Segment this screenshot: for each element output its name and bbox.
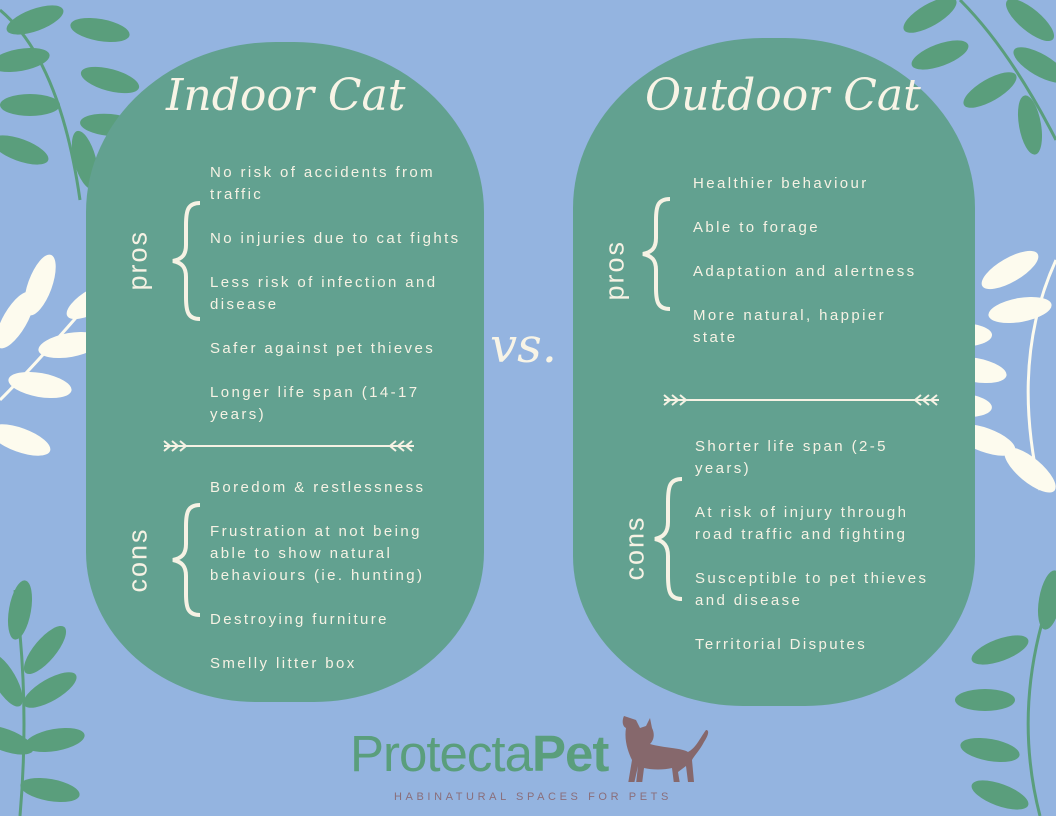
logo wordmark: ProtectaPet bbox=[350, 725, 608, 782]
divider arrow: outdoor bbox=[663, 394, 939, 406]
list: outdoor cons: road traffic and fighting bbox=[695, 526, 907, 543]
logo: ProtectaPet bbox=[350, 716, 708, 803]
list: outdoor cons: years) bbox=[695, 460, 751, 477]
list: indoor pros: years) bbox=[210, 406, 266, 423]
label: outdoor cons: cons bbox=[620, 515, 650, 580]
list: outdoor pros: Able to forage bbox=[693, 219, 820, 236]
list: indoor pros: traffic bbox=[210, 186, 263, 203]
brace: indoor pros bbox=[172, 201, 200, 321]
list: indoor pros: No risk of accidents from bbox=[210, 164, 435, 181]
list: indoor pros: disease bbox=[210, 296, 279, 313]
title: outdoor cat: Outdoor Cat bbox=[645, 70, 921, 121]
list: indoor cons: Destroying furniture bbox=[210, 611, 389, 628]
list: outdoor cons: Territorial Disputes bbox=[695, 636, 867, 653]
label: indoor pros: pros bbox=[122, 230, 152, 290]
divider arrow: indoor bbox=[163, 440, 414, 452]
list: indoor pros: Less risk of infection and bbox=[210, 274, 438, 291]
list: indoor cons: able to show natural bbox=[210, 545, 392, 562]
list: indoor pros: No injuries due to cat fights bbox=[210, 230, 461, 247]
list: indoor pros bbox=[210, 164, 461, 423]
list: indoor pros: Safer against pet thieves bbox=[210, 340, 435, 357]
list: indoor cons bbox=[210, 479, 425, 672]
leaves: top-right green bbox=[899, 0, 1056, 156]
panel: indoor cat bbox=[86, 42, 484, 702]
panel: outdoor cat bbox=[573, 38, 975, 706]
list: outdoor pros: Adaptation and alertness bbox=[693, 263, 917, 280]
list: outdoor pros: Healthier behaviour bbox=[693, 175, 869, 192]
list: outdoor cons: Susceptible to pet thieves bbox=[695, 570, 928, 587]
icon: cat silhouette bbox=[622, 716, 708, 782]
label: indoor cons: cons bbox=[122, 527, 152, 592]
label: outdoor pros: pros bbox=[600, 240, 630, 300]
list: indoor cons: Frustration at not being bbox=[210, 523, 422, 540]
brace: outdoor cons bbox=[654, 477, 682, 601]
list: indoor cons: Smelly litter box bbox=[210, 655, 357, 672]
list: outdoor pros: More natural, happier bbox=[693, 307, 886, 324]
leaves: top-left green bbox=[0, 0, 142, 200]
leaves: bottom-right green bbox=[955, 569, 1056, 816]
logo tagline: HABINATURAL SPACES FOR PETS bbox=[394, 791, 672, 803]
list: outdoor cons: At risk of injury through bbox=[695, 504, 908, 521]
title: indoor cat: Indoor Cat bbox=[166, 70, 405, 121]
vs.: vs. bbox=[490, 318, 557, 374]
leaves: right white bbox=[927, 244, 1056, 500]
list: indoor cons: behaviours (ie. hunting) bbox=[210, 567, 424, 584]
leaves: left white bbox=[0, 251, 129, 462]
list: indoor cons: Boredom & restlessness bbox=[210, 479, 425, 496]
list: outdoor cons: Shorter life span (2-5 bbox=[695, 438, 888, 455]
list: outdoor pros bbox=[693, 175, 917, 346]
list: indoor pros: Longer life span (14-17 bbox=[210, 384, 419, 401]
list: outdoor cons bbox=[695, 438, 928, 653]
brace: outdoor pros bbox=[642, 197, 670, 311]
brace: indoor cons bbox=[172, 503, 200, 617]
leaves: bottom-left green bbox=[0, 579, 86, 816]
list: outdoor cons: and disease bbox=[695, 592, 802, 609]
list: outdoor pros: state bbox=[693, 329, 738, 346]
